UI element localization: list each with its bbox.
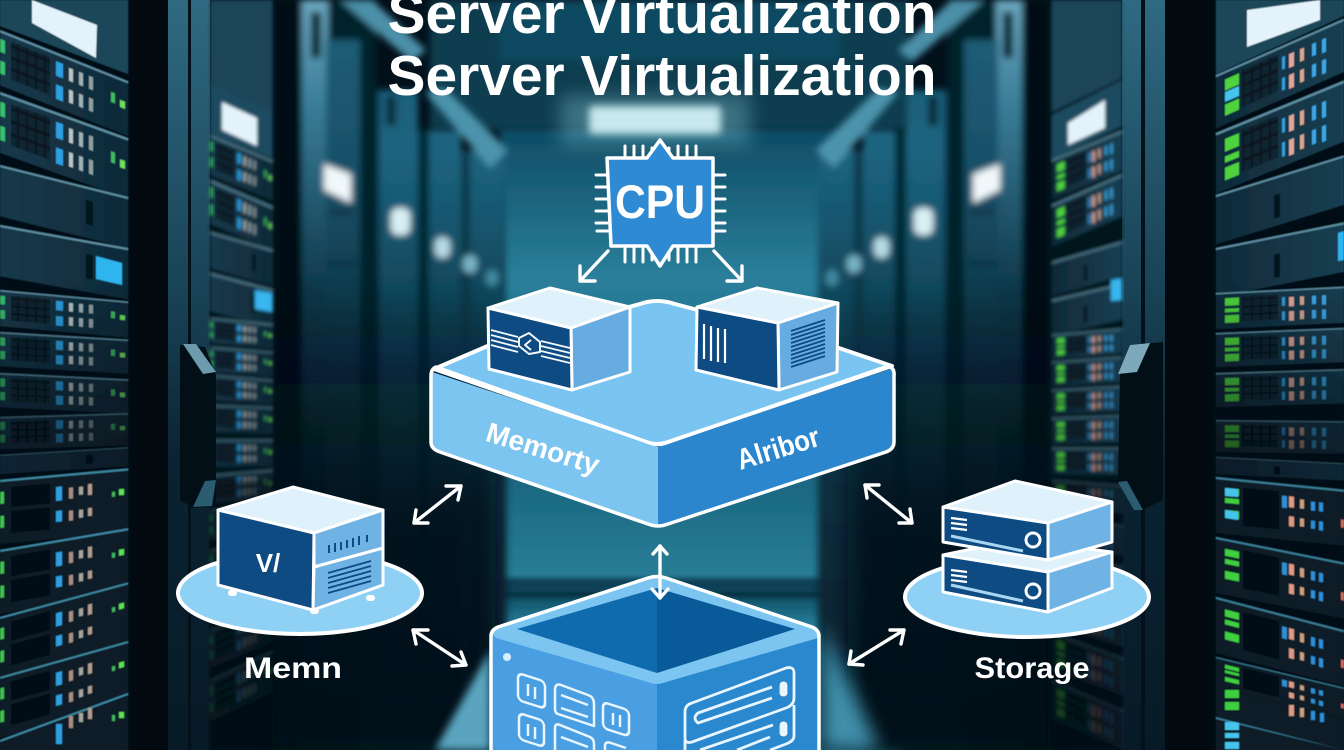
left latch [180, 344, 216, 508]
right second rack [1048, 0, 1122, 750]
rack darkening [1048, 320, 1122, 750]
dark band at wall base [440, 578, 900, 592]
last cut-off row [0, 693, 128, 750]
server side upper [314, 510, 383, 567]
unit top [943, 481, 1112, 523]
unit slots [951, 570, 967, 582]
corridor floor [440, 595, 900, 750]
left dark gap [130, 0, 168, 750]
left server box on platform [488, 288, 630, 390]
cyan blocks on first row [1225, 86, 1239, 102]
box top [488, 288, 630, 328]
arrow: CPU to left server [580, 251, 608, 281]
box front [488, 308, 572, 390]
node disc [178, 552, 422, 634]
lower storage unit [943, 540, 1112, 612]
upper vents [329, 535, 367, 553]
cyan tag [255, 290, 272, 312]
status lights [781, 683, 786, 695]
left face icons [518, 673, 629, 750]
arrow: CPU to right server [714, 251, 742, 281]
server front [218, 510, 314, 610]
right dark gap [1165, 0, 1215, 750]
right pillar [1122, 0, 1165, 750]
rack cyan tag [96, 256, 122, 285]
ceiling [430, 0, 910, 130]
box right side [778, 303, 838, 390]
rack top panel [0, 0, 128, 74]
box emblem [519, 333, 540, 354]
mid-left corridor racks [275, 0, 508, 750]
CPU label: CPU [615, 175, 705, 228]
floor highlight, left [435, 650, 490, 750]
chip pins [596, 146, 725, 262]
left second rack [210, 0, 275, 750]
upper storage unit [943, 481, 1112, 560]
left node [178, 487, 422, 685]
floor highlight, right [822, 625, 880, 750]
cube opening [517, 588, 657, 673]
arrow: right node to cube [849, 630, 904, 665]
cube outline [491, 576, 819, 750]
ceiling light [589, 106, 721, 134]
right latch [1118, 342, 1163, 510]
left near rack [0, 0, 130, 750]
icon: CPU chip [596, 140, 725, 266]
display [1068, 100, 1105, 145]
cube left face [492, 632, 657, 750]
corridor back wall [500, 128, 840, 590]
rack server outline [685, 668, 794, 742]
node label: Memn [244, 652, 342, 685]
box side vents [791, 320, 825, 367]
box vertical bars [704, 324, 725, 363]
small module 2 [519, 713, 544, 747]
node label: Storage [974, 652, 1090, 685]
title [388, 0, 936, 108]
small module 4 [605, 742, 626, 750]
list module 1 [555, 685, 594, 726]
arrow: platform to right node [865, 485, 912, 523]
server side lower [313, 548, 383, 610]
cube status dot [503, 653, 511, 661]
right near rack [1212, 0, 1344, 750]
unit front [943, 507, 1048, 560]
display [222, 102, 257, 146]
rack top panel [1216, 0, 1344, 74]
right node [905, 481, 1149, 685]
last cut-off row [1216, 717, 1344, 750]
lower row backing [1216, 688, 1344, 750]
unit top [943, 540, 1112, 572]
platform top [434, 301, 892, 444]
server mark: V/ [256, 548, 280, 578]
ceiling glow [560, 95, 750, 145]
module bars [528, 684, 620, 739]
central platform [431, 301, 894, 526]
node disc [905, 557, 1149, 637]
chip body [607, 140, 713, 266]
arrow: left node to cube [413, 630, 466, 666]
small module 1 [518, 673, 545, 709]
cube right face [657, 632, 818, 750]
cube rim [492, 578, 819, 684]
server feet [231, 593, 372, 611]
list module 2 [555, 724, 594, 750]
right face icons [685, 668, 794, 750]
vent panel [210, 0, 272, 122]
rack darkening [210, 320, 275, 750]
arrow: platform to cube [652, 546, 668, 598]
unit front [943, 555, 1048, 612]
cyan-marked row over green blocks [1225, 488, 1238, 497]
unit side [1048, 502, 1112, 560]
node server [218, 487, 383, 611]
small module 3 [603, 702, 629, 736]
box right side [571, 307, 630, 390]
vent panel [1052, 0, 1122, 112]
platform text: Memorty: Memorty [483, 417, 604, 480]
box front stripes [491, 330, 570, 363]
dim darkening over rows [1212, 280, 1344, 465]
lower darkening, right [848, 280, 1058, 750]
rack cyan tag [1338, 231, 1344, 261]
left pillar [168, 0, 210, 750]
title line 2: Server Virtualization [388, 44, 936, 108]
server top [218, 487, 383, 533]
lower darkening, left [270, 280, 495, 750]
rack display [1247, 0, 1320, 47]
arrow: platform to left node [414, 486, 461, 523]
rack display [32, 0, 97, 58]
lower vents [328, 561, 371, 593]
box top [697, 288, 838, 323]
platform right face [658, 368, 893, 526]
box front [696, 307, 779, 390]
platform left face [432, 372, 658, 526]
cyan tag [1111, 278, 1122, 301]
right server box on platform [696, 288, 838, 390]
bottom cube [491, 576, 819, 750]
unit slots [951, 518, 967, 530]
platform text: Alribor: Alribor [733, 421, 824, 477]
dim darkening over rows [0, 280, 130, 465]
platform outline [431, 366, 894, 526]
unit side [1048, 552, 1112, 612]
mid-right corridor racks [816, 0, 1049, 750]
